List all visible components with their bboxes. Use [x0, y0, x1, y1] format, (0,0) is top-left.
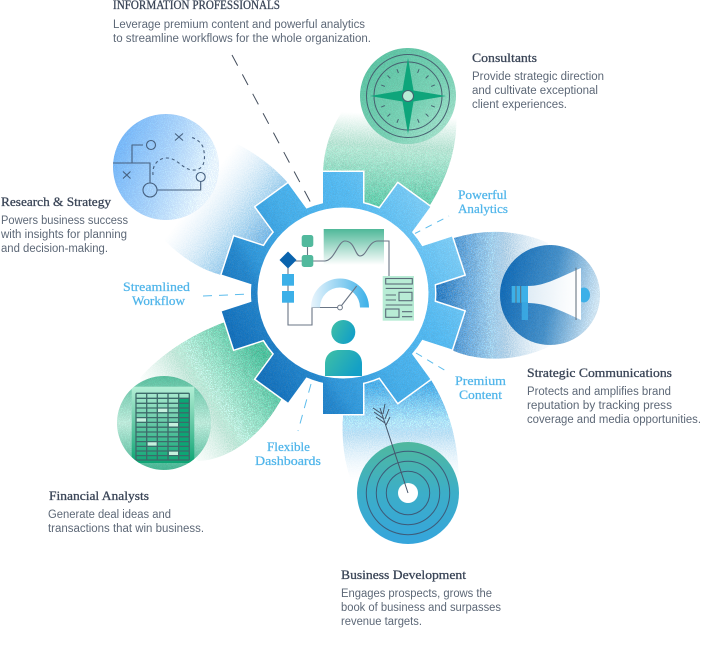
gauge — [311, 278, 369, 310]
center illustration — [280, 229, 414, 376]
gear — [215, 165, 471, 421]
dashed leader: premium content — [416, 353, 446, 371]
icon: research map circle — [113, 114, 219, 220]
label: powerful analytics: Analytics — [458, 201, 508, 216]
text block: consultants: Provide strategic direction — [472, 71, 604, 83]
icon: spreadsheet circle — [117, 376, 211, 470]
flow node: blue bottom — [282, 291, 294, 303]
label: premium content: Content — [459, 387, 502, 402]
text block: financial analysts: Financial Analysts — [49, 488, 149, 503]
label: streamlined workflow — [123, 279, 191, 308]
flow node: blue top — [282, 274, 294, 286]
text block: financial analysts: Generate deal ideas and — [48, 509, 171, 521]
dashed leader: powerful analytics — [414, 216, 449, 234]
text block: business development: Engages prospects, grows the — [341, 588, 492, 600]
petal: consultants — [323, 92, 456, 293]
document — [383, 276, 414, 321]
text block: strategic communications: Protects and amplifies brand — [527, 386, 671, 398]
label: streamlined workflow: Workflow — [132, 293, 186, 308]
flow node: green bottom — [302, 255, 313, 267]
text block: financial analysts — [48, 488, 204, 535]
connector lines — [288, 241, 389, 325]
text block: consultants: client experiences. — [472, 99, 567, 111]
person icon — [325, 320, 362, 376]
text block: information professionals: Leverage premium content and powerful analytics — [113, 19, 365, 31]
label: flexible dashboards — [255, 439, 321, 468]
petal: strategic communications — [343, 232, 552, 359]
flow node: green top — [302, 235, 313, 247]
petal: research and strategy — [150, 133, 343, 293]
dashed leader: flexible dashboards — [298, 384, 311, 431]
text block: business development — [341, 567, 501, 628]
text block: strategic communications — [527, 365, 701, 426]
dashed leader: information professionals — [232, 55, 312, 205]
dashed leader: streamlined workflow — [203, 294, 251, 296]
text block: information professionals — [113, 0, 371, 45]
text block: strategic communications: Strategic Communications — [527, 365, 672, 380]
petal: business development — [343, 293, 459, 497]
text block: research and strategy: Powers business success — [1, 215, 128, 227]
label: powerful analytics — [458, 187, 508, 216]
label: premium content: Premium — [455, 373, 506, 388]
text block: financial analysts: transactions that win business. — [48, 523, 204, 535]
chart area — [324, 229, 384, 265]
petal: financial analysts — [140, 293, 343, 461]
label: streamlined workflow: Streamlined — [123, 279, 191, 294]
text block: strategic communications: reputation by tracking press — [527, 400, 672, 412]
text block: business development: book of business and surpasses — [341, 602, 501, 614]
text block: business development: revenue targets. — [341, 616, 422, 628]
text block: research and strategy: with insights for planning — [0, 229, 127, 241]
flow node: diamond — [280, 252, 296, 268]
label: flexible dashboards: Flexible — [267, 439, 310, 454]
text block: information professionals: to streamline workflows for the whole organization. — [113, 33, 371, 45]
icon: compass circle — [360, 48, 456, 144]
label: powerful analytics: Powerful — [458, 187, 507, 202]
text block: consultants: Consultants — [472, 50, 537, 65]
text block: business development: Business Development — [341, 567, 466, 582]
text block: research and strategy: Research & Strategy — [1, 194, 112, 209]
text block: consultants — [472, 50, 604, 111]
icon: megaphone circle — [500, 245, 600, 345]
icon: target circle — [357, 404, 459, 544]
text block: research and strategy: and decision-making. — [1, 243, 108, 255]
label: flexible dashboards: Dashboards — [255, 453, 321, 468]
label: premium content — [455, 373, 506, 402]
text block: research and strategy — [0, 194, 128, 255]
text block: consultants: and cultivate exceptional — [472, 85, 598, 97]
text block: strategic communications: coverage and media opportunities. — [527, 414, 701, 426]
